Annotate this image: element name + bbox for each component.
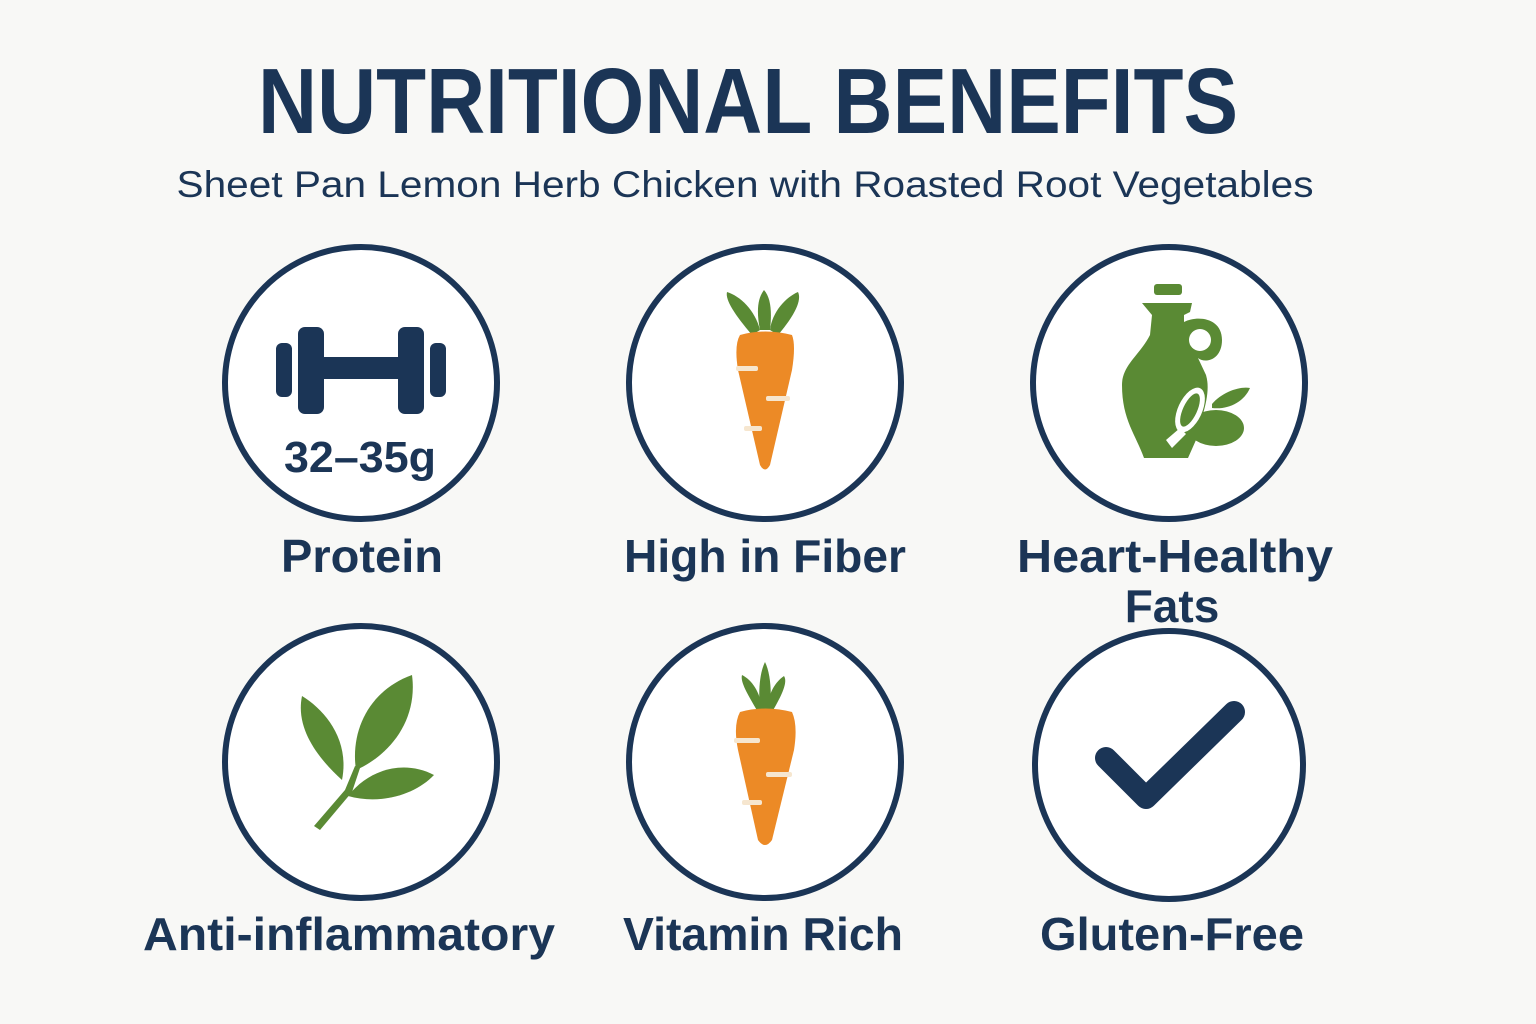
panel: vitamin [623, 626, 903, 960]
label: gluten-free: Gluten-Free [1040, 908, 1304, 960]
icon: carrot [727, 290, 799, 470]
label: fiber: High in Fiber [624, 530, 906, 582]
subtitle: Sheet Pan Lemon Herb Chicken with Roasted Root Vegetables [176, 164, 1314, 205]
label: anti-inflammatory: Anti-inflammatory [143, 908, 555, 960]
panel: fats: Fats [1125, 580, 1219, 632]
label: protein: Protein [281, 530, 443, 582]
panel: fiber [624, 247, 906, 582]
amount: 32–35g [284, 433, 436, 482]
icon: checkmark [1106, 712, 1234, 798]
icon: oil jug [1122, 284, 1250, 458]
panel: anti-inflammatory [143, 626, 555, 960]
panel: protein [225, 247, 497, 582]
icon: carrot [734, 662, 796, 845]
icon: leaves [301, 675, 434, 830]
title: NUTRITIONAL BENEFITS [258, 49, 1238, 153]
panel: gluten-free [1035, 631, 1304, 960]
label: vitamin: Vitamin Rich [623, 908, 903, 960]
panel: fats [1017, 247, 1333, 632]
icon: dumbbell [276, 327, 446, 414]
label: fats: Heart-Healthy [1017, 530, 1333, 582]
